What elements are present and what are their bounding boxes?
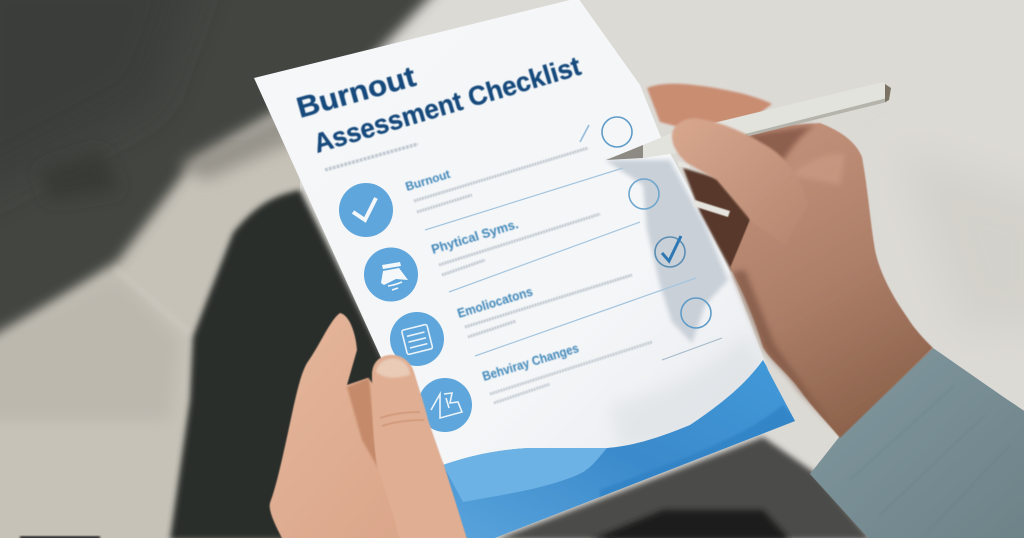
icon: head outline	[418, 378, 472, 432]
gap between fingers	[683, 168, 752, 272]
left hand	[270, 313, 467, 538]
row 2: Physical symptoms	[364, 214, 640, 302]
thumb over pen	[672, 118, 808, 245]
row heading: Burnout	[404, 167, 452, 194]
thumbnail	[376, 358, 410, 378]
soft shade near footer	[617, 348, 758, 444]
right sleeve	[810, 348, 1024, 538]
pen	[606, 82, 891, 160]
row heading: Behviray Changes	[480, 340, 581, 384]
checkbox 3 ticked	[655, 236, 685, 267]
row 4: Behaviour changes	[418, 338, 722, 432]
checkbox 2	[629, 179, 659, 209]
web shading	[347, 378, 378, 468]
paper glimpse	[693, 200, 730, 217]
palm shade	[745, 125, 815, 165]
checkbox 4	[681, 298, 711, 328]
row body text lines	[414, 148, 588, 212]
right hand holding pen	[647, 84, 933, 438]
title: Assessment Checklist	[310, 51, 584, 159]
index finger	[647, 84, 772, 130]
row body text lines	[439, 214, 600, 275]
icon: check circle	[339, 183, 393, 237]
row heading: Emoliocatons	[455, 284, 534, 321]
row heading: Phytical Syms.	[429, 216, 520, 257]
index finger and back of hand	[270, 313, 467, 538]
blue wave footer	[443, 360, 800, 538]
checkbox 1 with tick	[580, 117, 632, 147]
row 1: Burnout	[339, 148, 623, 237]
icon: bell	[364, 248, 418, 302]
subtitle placeholder text	[325, 144, 418, 170]
thumb	[372, 355, 467, 538]
back of hand and palm	[720, 123, 933, 438]
title: Burnout	[293, 61, 420, 125]
paper shadow from the writing hand	[605, 160, 728, 343]
paper sheet	[254, 0, 800, 538]
row 3: Emotional	[390, 275, 696, 366]
icon: note list	[390, 312, 444, 366]
row body text lines	[490, 342, 652, 403]
dark trousers	[20, 190, 872, 538]
knuckle creases	[380, 412, 424, 426]
row body text lines	[465, 275, 632, 337]
